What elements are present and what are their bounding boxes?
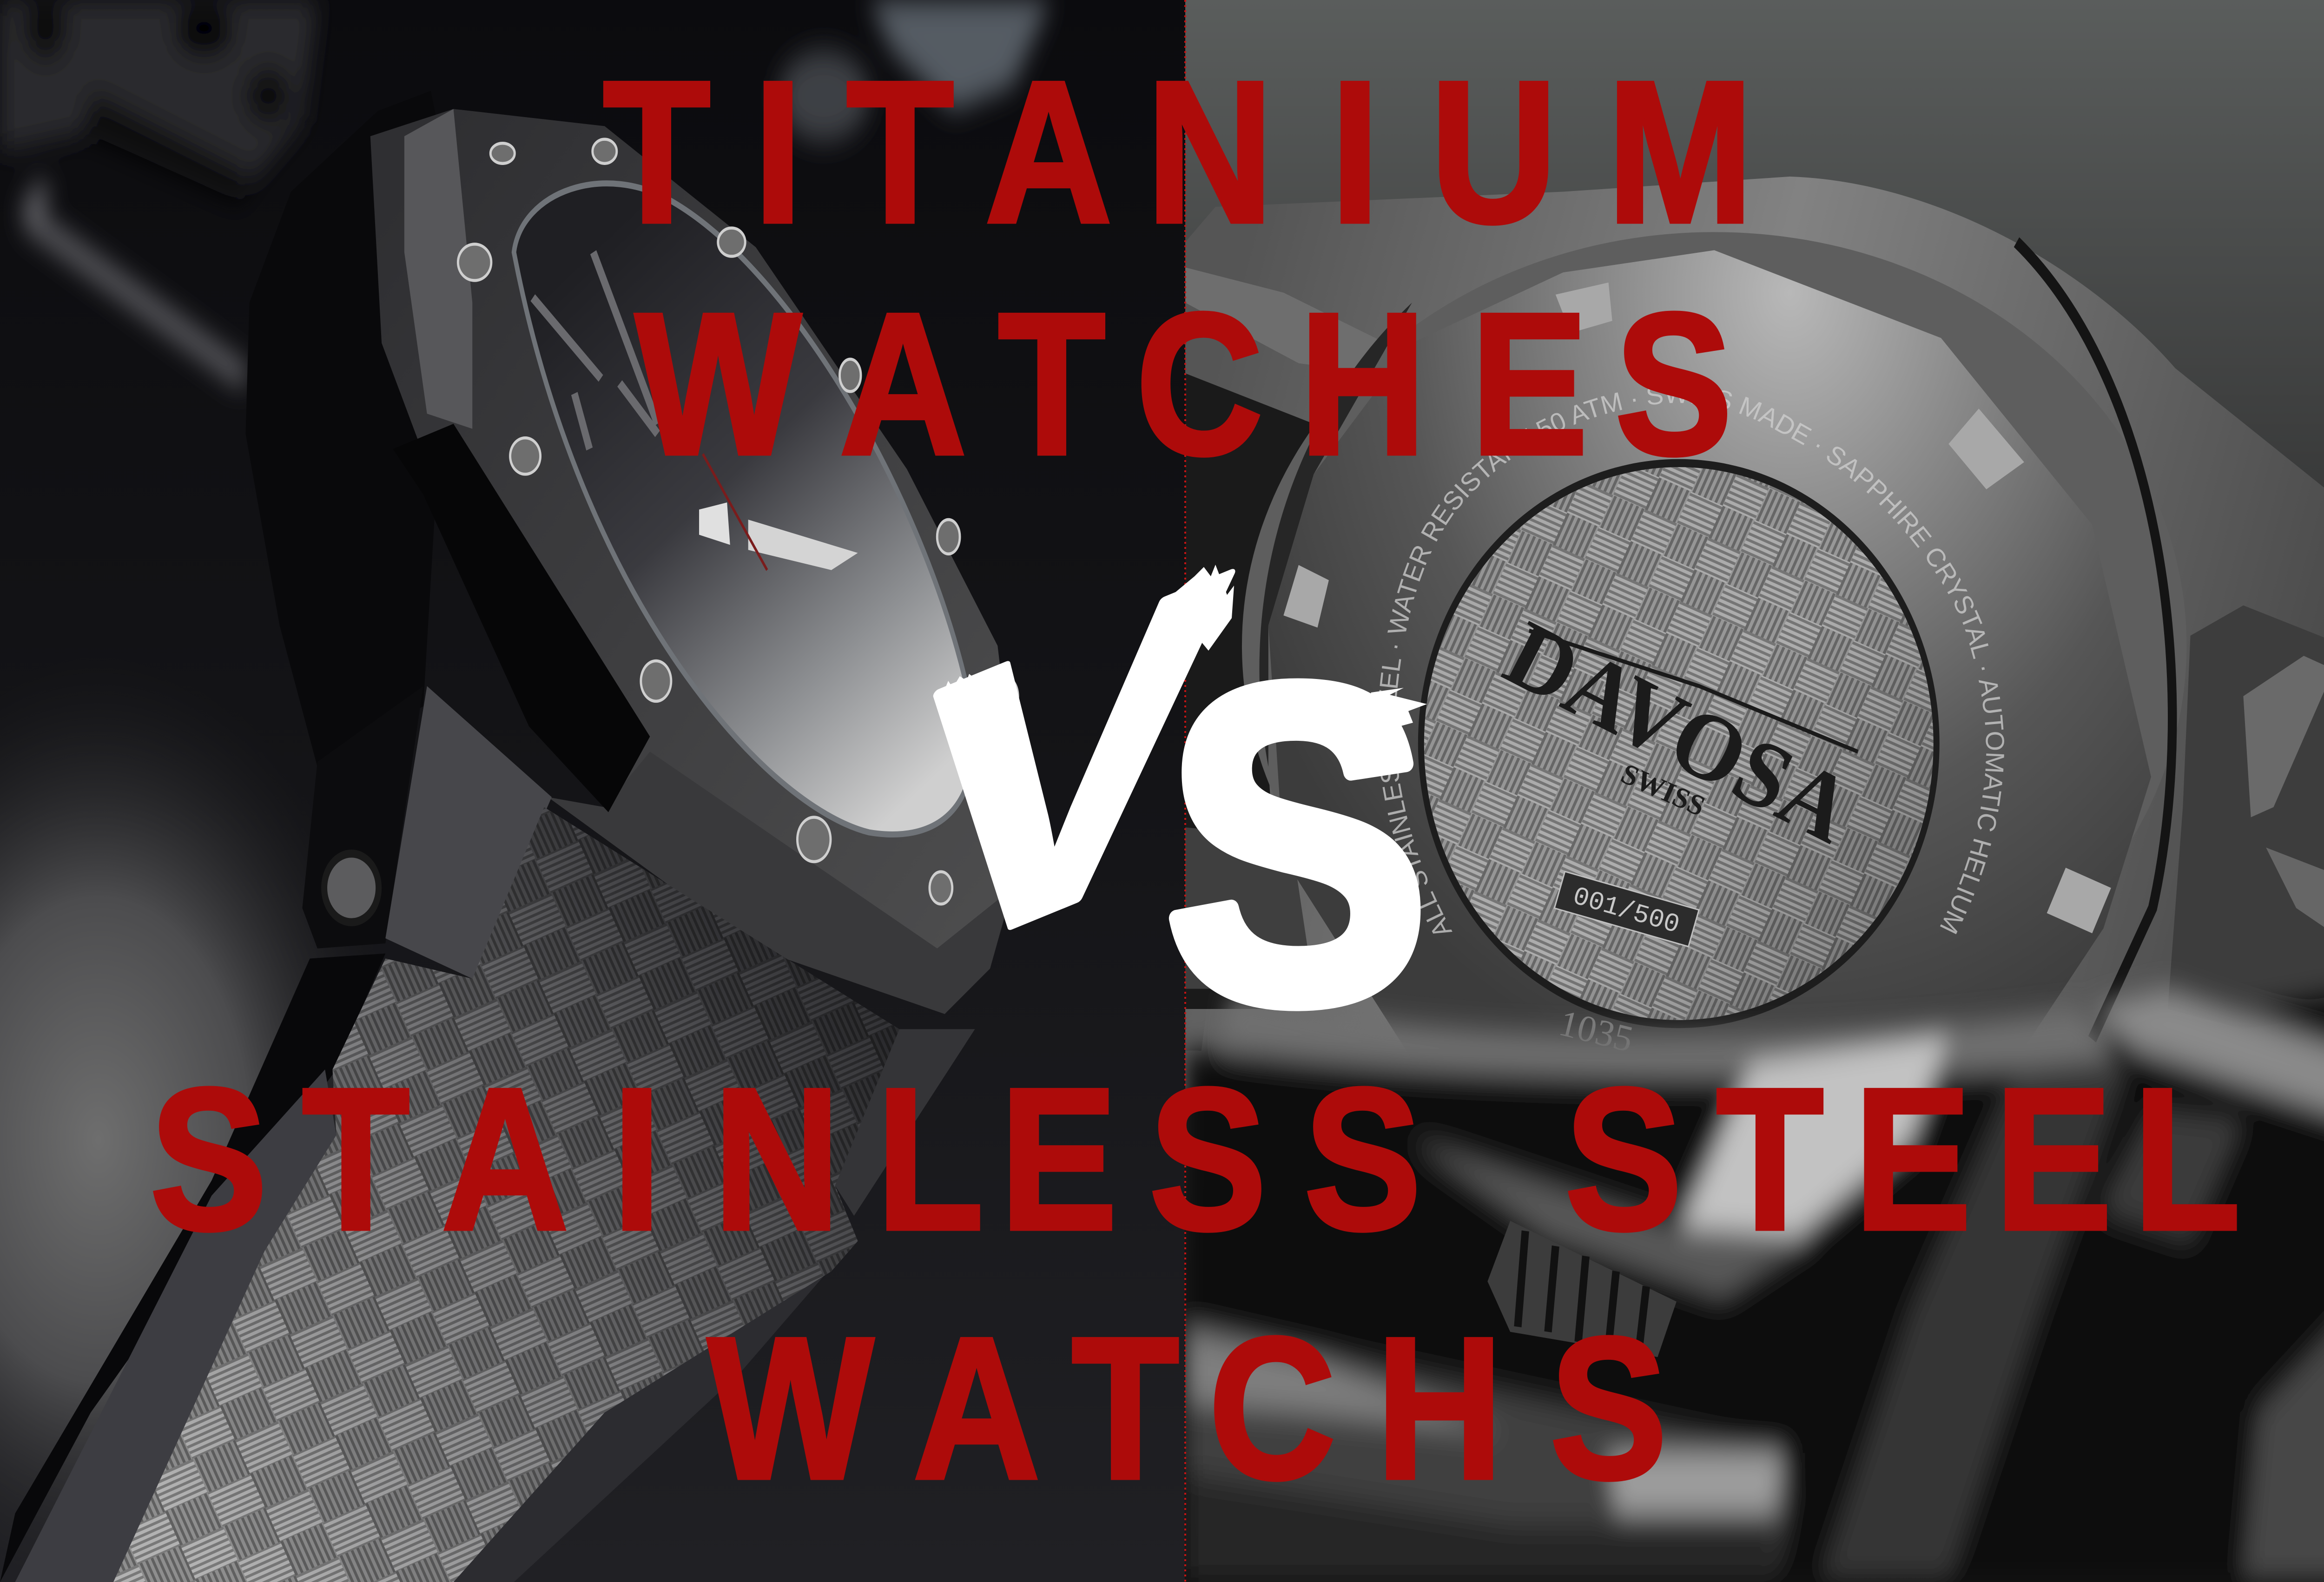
caseback number: 1035 (1555, 1002, 1637, 1060)
bracelet left link (1185, 267, 1386, 373)
panel: stainless steel watch photo (1185, 0, 2324, 1582)
VS brush lettering: S (1165, 595, 1428, 1093)
case back plate (1268, 250, 2151, 1060)
bezel (370, 109, 1020, 984)
lower lug dark (302, 686, 423, 949)
crown (1487, 1221, 1677, 1357)
swiss label: SWISS (1617, 758, 1710, 823)
VS brush lettering: V (884, 484, 1248, 1059)
serial plate: 001/500 (1570, 882, 1683, 940)
textured strap (113, 807, 899, 1582)
strap grey rubber edge (15, 1069, 337, 1582)
watch case side (245, 91, 454, 767)
right bracelet links (2168, 606, 2324, 1029)
right background (1185, 0, 2324, 1582)
engraved ring text: ALL STAINLESS STEEL · WATER RESISTANT 50 ATM · SWISS MADE · SAPPHIRE CRYSTAL · AUTOMATIC HELIUM (1372, 379, 2010, 943)
brand logo: DAVOSA (1490, 600, 1869, 863)
dial (514, 184, 974, 834)
centre divider (1184, 0, 1186, 1582)
title: titanium watches: TITANIUM (603, 40, 1753, 265)
bezel side light band (404, 109, 472, 429)
watch case (1185, 177, 2324, 1120)
strap side right (835, 1029, 975, 1216)
medallion (1418, 459, 1940, 1028)
title: titanium watches (603, 40, 1753, 497)
title: stainless steel watchs: STAINLESS STEEL (150, 1047, 2240, 1272)
lug screw (324, 854, 379, 922)
dark left interior (1185, 373, 1314, 1009)
strap outer black edge (0, 954, 385, 1582)
title: titanium watches: WATCHES (635, 271, 1732, 497)
logo rule (1529, 631, 1858, 751)
serial plate (1554, 871, 1699, 947)
case back notches (1283, 283, 2111, 933)
title: stainless steel watchs: WATCHS (708, 1296, 1667, 1521)
strap lower edge (454, 1241, 854, 1582)
blurred foreground bracelet (1185, 989, 2324, 1582)
dark rim arc (2017, 242, 2172, 1039)
left background (0, 0, 1185, 1582)
VS brush lettering (884, 484, 1428, 1093)
bezel screws (458, 139, 1018, 904)
panel: titanium watch photo (0, 0, 1185, 1582)
blurred background strap (0, 0, 1050, 378)
dark left rim (1259, 303, 1412, 767)
dark crown guard notch (393, 424, 650, 812)
bezel lower side (548, 751, 1013, 1014)
blurred glow on table (0, 656, 401, 1582)
lug (385, 686, 552, 979)
lower left link (1185, 827, 1314, 989)
dial hands and indices (533, 252, 858, 570)
case rim (1242, 232, 2186, 1060)
title: stainless steel watchs (150, 1047, 2240, 1521)
